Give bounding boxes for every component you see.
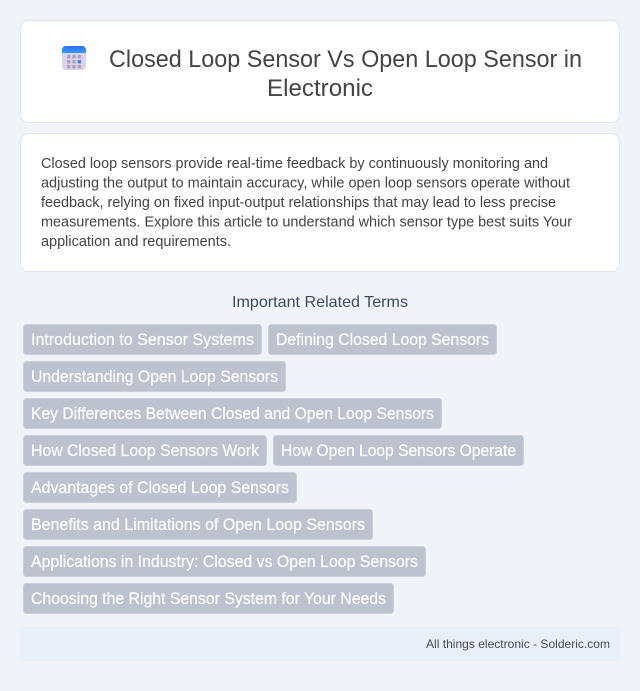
tag: How Open Loop Sensors Operate xyxy=(281,442,516,460)
footer: All things electronic - Solderic.com xyxy=(426,637,610,651)
tag: Advantages of Closed Loop Sensors xyxy=(31,479,289,497)
tag xyxy=(24,510,372,540)
text block: description: measurements. Explore this article to understand which sensor type best suits Your xyxy=(41,214,572,230)
tag xyxy=(274,436,524,466)
title xyxy=(109,46,582,102)
panel: header xyxy=(20,20,620,122)
tag: Introduction to Sensor Systems xyxy=(31,331,254,349)
footer xyxy=(20,627,620,661)
title: Electronic xyxy=(267,75,373,102)
text block: description: adjusting the output to maintain accuracy, while open loop sensors operate without xyxy=(41,176,570,192)
title: Closed Loop Sensor Vs Open Loop Sensor in xyxy=(109,46,582,73)
tag xyxy=(24,362,286,392)
tag xyxy=(24,584,394,614)
tag xyxy=(24,546,426,576)
tag list xyxy=(24,324,524,614)
text block: description: application and requirements. xyxy=(41,234,231,250)
tag: Key Differences Between Closed and Open Loop Sensors xyxy=(31,405,434,423)
tag xyxy=(24,324,262,354)
tag: How Closed Loop Sensors Work xyxy=(31,442,260,460)
text block: description: Closed loop sensors provide real-time feedback by continuously monitoring and xyxy=(41,156,548,172)
panel: description xyxy=(20,134,620,272)
tag: Defining Closed Loop Sensors xyxy=(276,331,489,349)
tag xyxy=(24,472,296,502)
tag: Benefits and Limitations of Open Loop Sensors xyxy=(31,516,365,534)
tag: Applications in Industry: Closed vs Open Loop Sensors xyxy=(31,553,418,571)
text block: description xyxy=(41,156,572,250)
tag xyxy=(268,324,496,354)
tag xyxy=(24,398,442,428)
tag xyxy=(24,436,266,466)
tag: Choosing the Right Sensor System for Your Needs xyxy=(31,590,386,608)
tag: Understanding Open Loop Sensors xyxy=(31,368,278,386)
heading: related terms: Important Related Terms xyxy=(232,294,408,311)
icon: calendar xyxy=(62,46,86,70)
text block: description: feedback, relying on fixed input-output relationships that may lead to less precise xyxy=(41,195,556,211)
